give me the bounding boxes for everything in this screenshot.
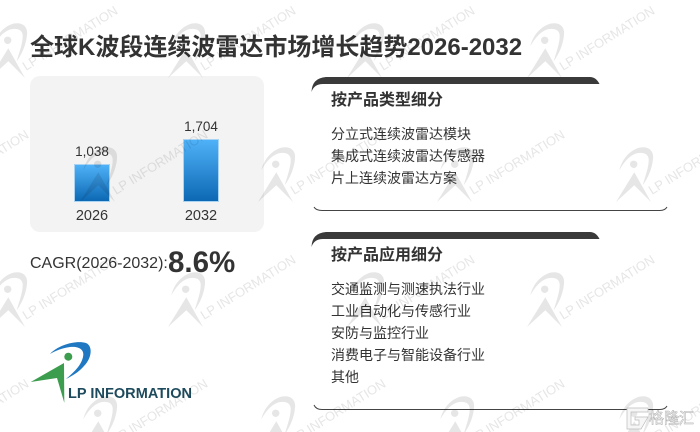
list: application segment: 交通监测与测速执法行业 [331, 281, 485, 297]
list: application segment [331, 281, 485, 385]
bar 2026 [74, 164, 110, 202]
watermark pattern: LP INFORMATION [110, 127, 210, 198]
CAGR label: CAGR(2026-2032): [30, 255, 168, 272]
watermark pattern: LP INFORMATION [467, 127, 567, 198]
watermark pattern: LP INFORMATION [198, 252, 298, 323]
panel: bar chart [30, 76, 264, 232]
watermark pattern: LP INFORMATION [288, 127, 388, 198]
list: application segment: 安防与监控行业 [331, 325, 429, 341]
list: type segment: 分立式连续波雷达模块 [331, 126, 471, 142]
list: application segment: 消费电子与智能设备行业 [331, 347, 485, 363]
year 2026: 2026 [76, 208, 108, 224]
title: 全球K波段连续波雷达市场增长趋势2026-2032 [30, 34, 522, 61]
year 2032: 2032 [185, 208, 217, 224]
watermark pattern: LP INFORMATION [198, 3, 298, 74]
watermark pattern: LP INFORMATION [557, 252, 657, 323]
corner brand mark: 格隆汇 [649, 410, 694, 427]
watermark pattern: LP INFORMATION [20, 252, 120, 323]
value 2026: 1,038 [75, 144, 109, 159]
list: type segment [331, 126, 485, 186]
list: type segment: 集成式连续波雷达传感器 [331, 148, 485, 164]
company logo: LP INFORMATION [68, 386, 192, 402]
list: application segment: 工业自动化与传感行业 [331, 303, 471, 319]
company logo [30, 342, 192, 402]
CAGR value: 8.6% [168, 246, 235, 279]
value 2032: 1,704 [184, 119, 218, 134]
bar 2032 [183, 139, 219, 202]
heading: type segment: 按产品类型细分 [331, 92, 443, 109]
heading: application segment: 按产品应用细分 [331, 247, 443, 264]
corner brand mark [626, 408, 694, 430]
watermark pattern: LP INFORMATION [377, 252, 477, 323]
watermark pattern: LP INFORMATION [20, 3, 120, 74]
list: application segment: 其他 [331, 369, 359, 385]
watermark pattern: LP INFORMATION [377, 3, 477, 74]
list: type segment: 片上连续波雷达方案 [331, 170, 457, 186]
watermark pattern: LP INFORMATION [557, 3, 657, 74]
